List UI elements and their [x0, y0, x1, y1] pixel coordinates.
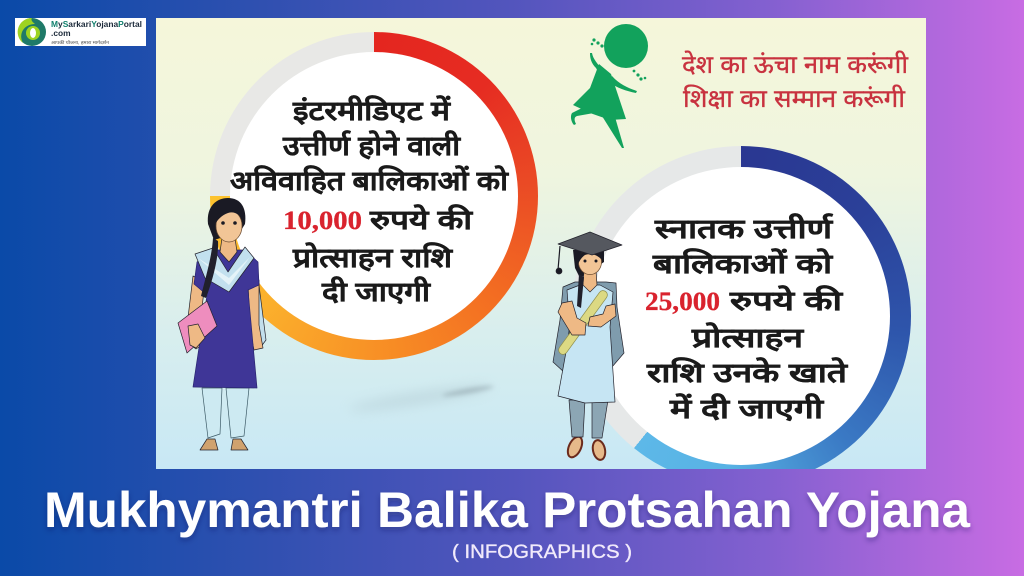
text: intermediate scheme: रुपये की	[369, 204, 473, 235]
shawl	[553, 282, 624, 373]
dupatta front	[195, 247, 254, 292]
title: Mukhymantri Balika Protsahan Yojana	[44, 482, 971, 538]
icon: green running girl	[571, 24, 648, 148]
eyes	[584, 260, 586, 262]
text: graduate scheme: प्रोत्साहन	[691, 322, 804, 353]
pants	[569, 400, 608, 438]
text: intermediate scheme: दी जाएगी	[321, 276, 431, 307]
logo: .com	[51, 28, 71, 38]
neck	[220, 238, 237, 262]
slogan text: देश का ऊंचा नाम करूंगी	[682, 50, 909, 79]
eyes	[221, 221, 225, 225]
sandals	[565, 434, 585, 460]
book	[178, 301, 217, 353]
dupatta inner fold	[198, 257, 250, 285]
text: graduate scheme: स्नातक उत्तीर्ण	[654, 213, 834, 244]
back hair	[208, 198, 245, 240]
mortarboard cap	[558, 232, 622, 255]
scroll	[563, 295, 603, 350]
text: intermediate scheme	[230, 95, 509, 307]
braid	[201, 238, 218, 298]
ring: intermediate scheme progress	[210, 32, 538, 360]
text: intermediate scheme: उत्तीर्ण होने वाली	[282, 130, 461, 161]
figure: graduate girl	[553, 232, 624, 461]
kurta	[193, 250, 259, 388]
disc: graduate text background	[592, 167, 890, 465]
slogan text: शिक्षा का सम्मान करूंगी	[683, 84, 906, 113]
braid	[577, 274, 584, 308]
arms	[187, 276, 263, 350]
slogan text	[682, 50, 909, 113]
fringe	[214, 205, 244, 226]
disc: intermediate text background	[230, 52, 518, 340]
figure: girl with books	[178, 198, 266, 450]
tassel end	[556, 268, 562, 274]
text: graduate scheme: बालिकाओं को	[652, 248, 833, 279]
fringe	[578, 250, 602, 264]
dupatta tail	[254, 262, 266, 348]
text: intermediate scheme: प्रोत्साहन राशि	[292, 242, 454, 273]
subtitle: ( INFOGRAPHICS )	[452, 542, 632, 563]
face	[216, 210, 242, 242]
text: intermediate scheme: अविवाहित बालिकाओं को	[230, 165, 509, 196]
panel: illustration	[156, 18, 926, 469]
ring: graduate scheme progress	[571, 146, 911, 486]
text: graduate scheme: में दी जाएगी	[669, 393, 824, 424]
sandal right	[591, 439, 607, 461]
logo: आपकी योजना, हमारा मार्गदर्शन	[51, 39, 110, 45]
ground shadow	[348, 381, 494, 415]
hand	[188, 324, 205, 348]
logo	[15, 18, 146, 46]
text: graduate scheme: राशि उनके खाते	[646, 357, 849, 388]
text: graduate scheme	[645, 213, 849, 424]
tassel	[558, 246, 560, 270]
logo: MySarkariYojanaPortal	[51, 19, 142, 29]
salwar	[202, 388, 249, 438]
sandals	[200, 439, 248, 450]
back hair	[573, 246, 604, 278]
text: intermediate scheme: इंटरमीडिएट में	[292, 95, 451, 126]
face	[578, 250, 602, 274]
scroll highlight	[563, 295, 603, 350]
kurta	[558, 285, 615, 403]
text: graduate scheme: 25,000	[645, 287, 720, 316]
text: intermediate scheme: 10,000	[283, 206, 362, 235]
neck	[583, 270, 597, 292]
text: graduate scheme: रुपये की	[729, 285, 843, 316]
arms and hands	[558, 301, 616, 335]
